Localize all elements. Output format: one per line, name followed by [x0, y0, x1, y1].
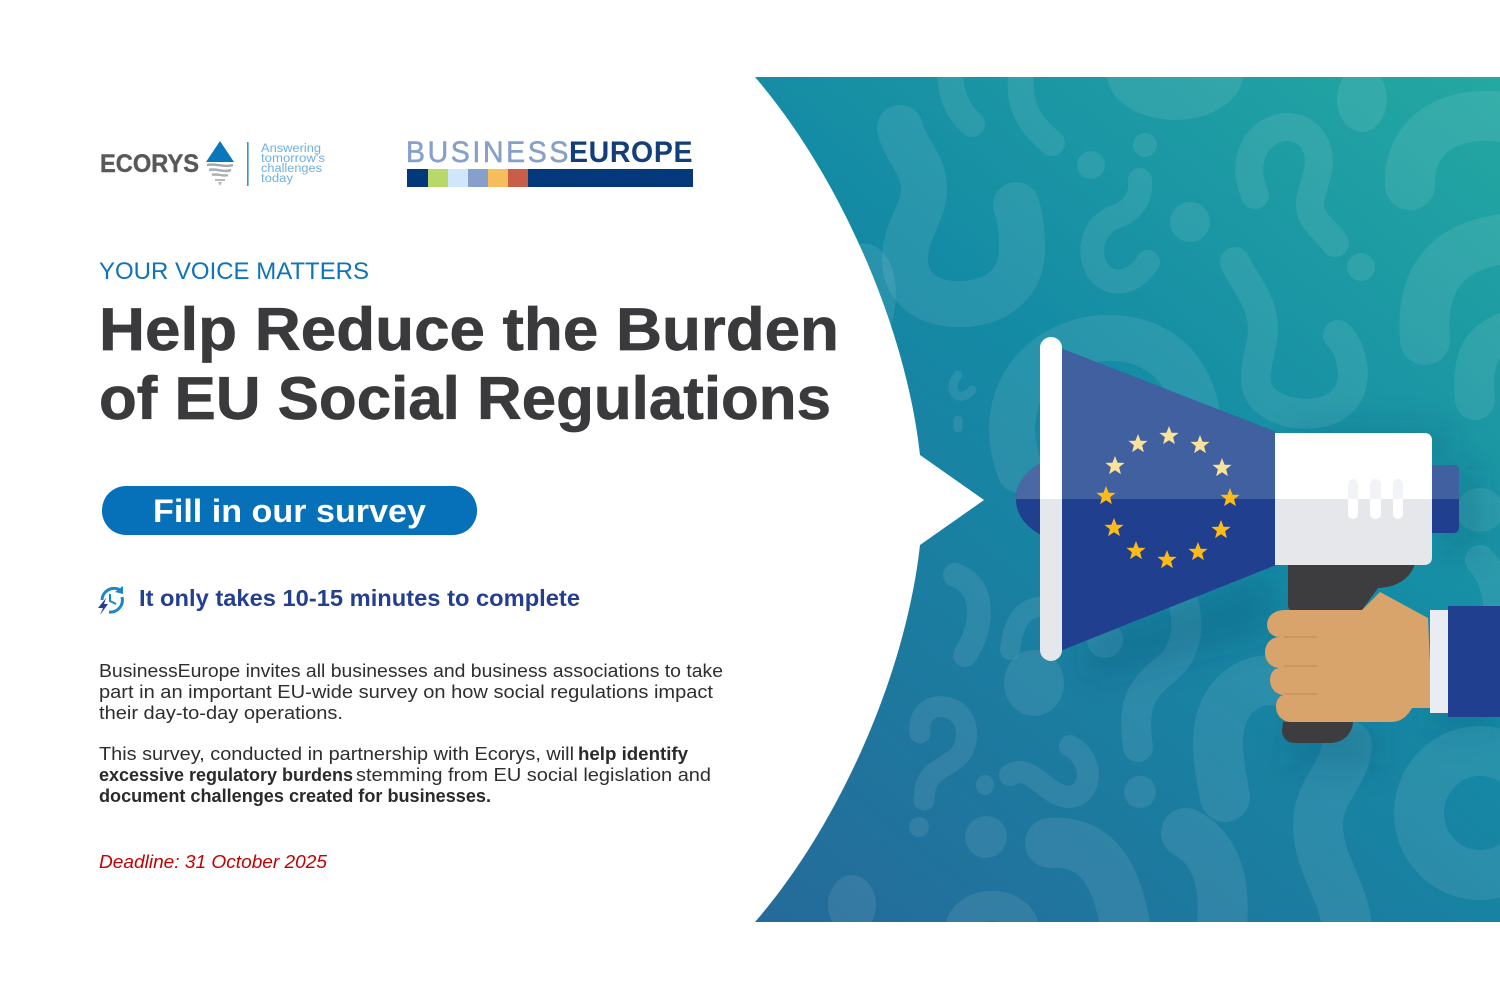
megaphone vents [1348, 479, 1403, 519]
icon: clock with lightning [98, 586, 123, 615]
text block: invitation: BusinessEurope invites all businesses and business associations to take [99, 661, 723, 681]
megaphone shadow [1085, 430, 1500, 765]
button: fill in our survey [102, 486, 477, 535]
divider [247, 142, 249, 186]
Ecorys tagline: challenges [261, 163, 322, 175]
title [99, 296, 839, 432]
logo: Ecorys [100, 141, 325, 186]
Ecorys triangle mark [206, 141, 234, 186]
text block: survey purpose [99, 744, 711, 806]
shirt cuff [1430, 610, 1448, 713]
deadline: Deadline: 31 October 2025 [99, 852, 328, 872]
text block: survey purpose: This survey, conducted in partnership with Ecorys, will [99, 744, 574, 764]
text block: survey purpose: help identify [578, 744, 688, 764]
handle base [1282, 722, 1353, 743]
pattern dots [828, 28, 1500, 935]
text block: invitation [99, 661, 723, 723]
sleeve [1448, 606, 1500, 717]
colour bar [407, 169, 693, 187]
EU stars [1096, 426, 1240, 568]
subheading: time to complete: It only takes 10-15 minutes to complete [139, 585, 580, 611]
text block: invitation: their day-to-day operations. [99, 703, 343, 723]
icon: megaphone with EU flag [1016, 337, 1500, 743]
BusinessEurope wordmark: BUSINESS [406, 136, 568, 169]
finger lines [1284, 637, 1317, 694]
megaphone rear bulge [1016, 461, 1045, 537]
text block: survey purpose: stemming from EU social legislation and [356, 765, 711, 785]
panel: teal speech-bubble background [755, 77, 1500, 922]
text block: invitation: part in an important EU-wide survey on how social regulations impact [99, 682, 713, 702]
Ecorys tagline: tomorrow's [261, 153, 325, 165]
Ecorys tagline: today [261, 173, 293, 185]
BusinessEurope wordmark: EUROPE [569, 136, 693, 169]
megaphone body [1275, 433, 1432, 565]
megaphone rim [1040, 337, 1062, 661]
megaphone horn [1060, 348, 1276, 651]
title: Help Reduce the Burden [99, 296, 839, 363]
hand [1265, 592, 1432, 722]
kicker: YOUR VOICE MATTERS [99, 258, 369, 285]
text block: survey purpose: excessive regulatory burdens [99, 765, 353, 785]
Ecorys tagline [261, 143, 325, 185]
BusinessEurope wordmark [406, 136, 692, 169]
button: fill in our survey: Fill in our survey [153, 493, 426, 529]
megaphone handle [1288, 560, 1416, 612]
Ecorys tagline: Answering [261, 143, 321, 155]
question mark pattern [860, 70, 1500, 954]
text block: survey purpose: document challenges created for businesses. [99, 786, 491, 806]
logo: BusinessEurope [406, 136, 693, 187]
title: of EU Social Regulations [99, 365, 831, 432]
megaphone rear cap [1430, 465, 1459, 533]
Ecorys wordmark: ECORYS [100, 150, 199, 178]
